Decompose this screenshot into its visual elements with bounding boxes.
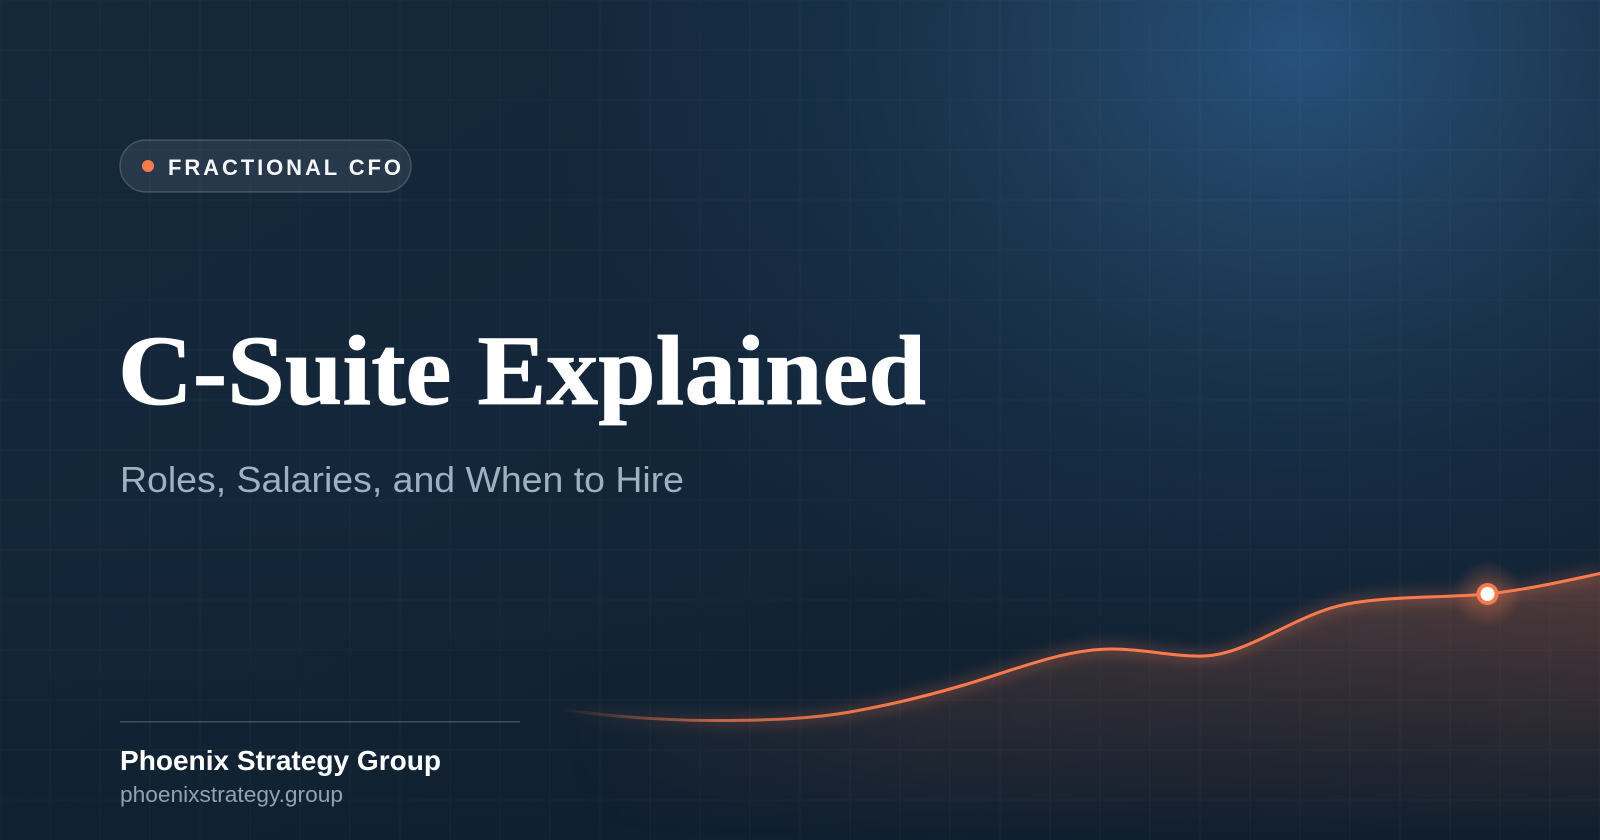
chart line glow xyxy=(566,574,1600,721)
footer divider xyxy=(120,721,520,722)
chart line xyxy=(566,574,1600,721)
tag pill xyxy=(120,140,411,192)
highlighted data point xyxy=(1454,560,1522,628)
company name: Phoenix Strategy Group xyxy=(120,745,441,776)
subtitle: Roles, Salaries, and When to Hire xyxy=(120,459,684,500)
chart area fill xyxy=(714,575,1600,804)
website: phoenixstrategy.group xyxy=(120,782,343,807)
growth chart line xyxy=(567,563,1600,804)
icon: orange dot xyxy=(142,160,154,172)
title: C-Suite Explained xyxy=(118,315,926,426)
tag label: FRACTIONAL CFO xyxy=(168,155,401,180)
